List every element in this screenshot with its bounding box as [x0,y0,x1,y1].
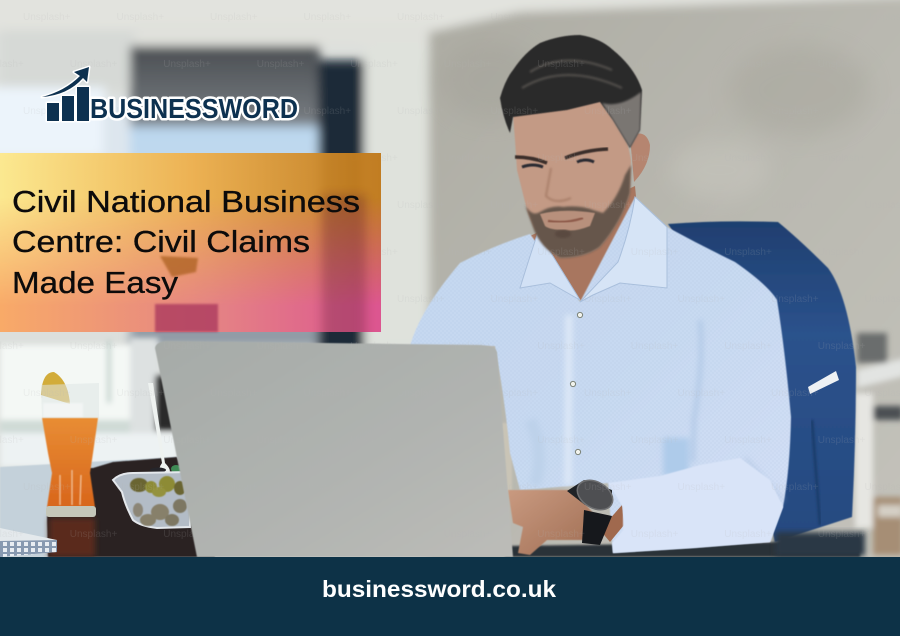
wristwatch [582,510,612,545]
glass [41,383,99,418]
title panel with gradient [0,153,381,345]
face [513,98,631,258]
shirt [410,197,791,553]
nose [546,168,571,201]
title text: Centre: Civil Claims [12,224,310,259]
notebook [0,528,57,557]
logo icon: bars and rising arrow [42,67,89,121]
skin around mouth [540,211,595,230]
collar [520,232,580,300]
shirt buttons [570,312,583,455]
shirt shadows and placket [530,315,783,500]
title text [12,184,360,300]
neck [530,186,640,306]
hair [500,35,642,148]
beard [525,165,631,258]
title text: Civil National Business [12,184,360,219]
eyebrows and eyes [515,149,608,167]
spoon [148,383,170,474]
logo: Businessword [42,67,298,124]
glass of orange juice [41,372,99,517]
mouth and chin patch [548,218,583,222]
dark panel showing through [322,195,366,345]
footer website text: businessword.co.uk [322,576,556,602]
man in blue shirt [410,35,791,555]
table [0,457,860,557]
bowl [113,472,190,528]
title text: Made Easy [12,265,179,300]
ear [630,133,650,182]
shirt cuff [608,458,783,553]
footer band [0,557,900,636]
hand [508,490,593,555]
logo wordmark: BUSINESSWORD [90,93,298,124]
blue jacket on chair [668,221,865,556]
bowl of olives with spoon [113,383,190,528]
grey temple [602,92,641,148]
juice [42,418,98,507]
background between laptop and shirt [494,423,512,491]
lemon slice [41,372,70,404]
background furniture at right edge [855,333,900,555]
laptop [155,341,513,557]
window and sill at left [0,338,178,467]
